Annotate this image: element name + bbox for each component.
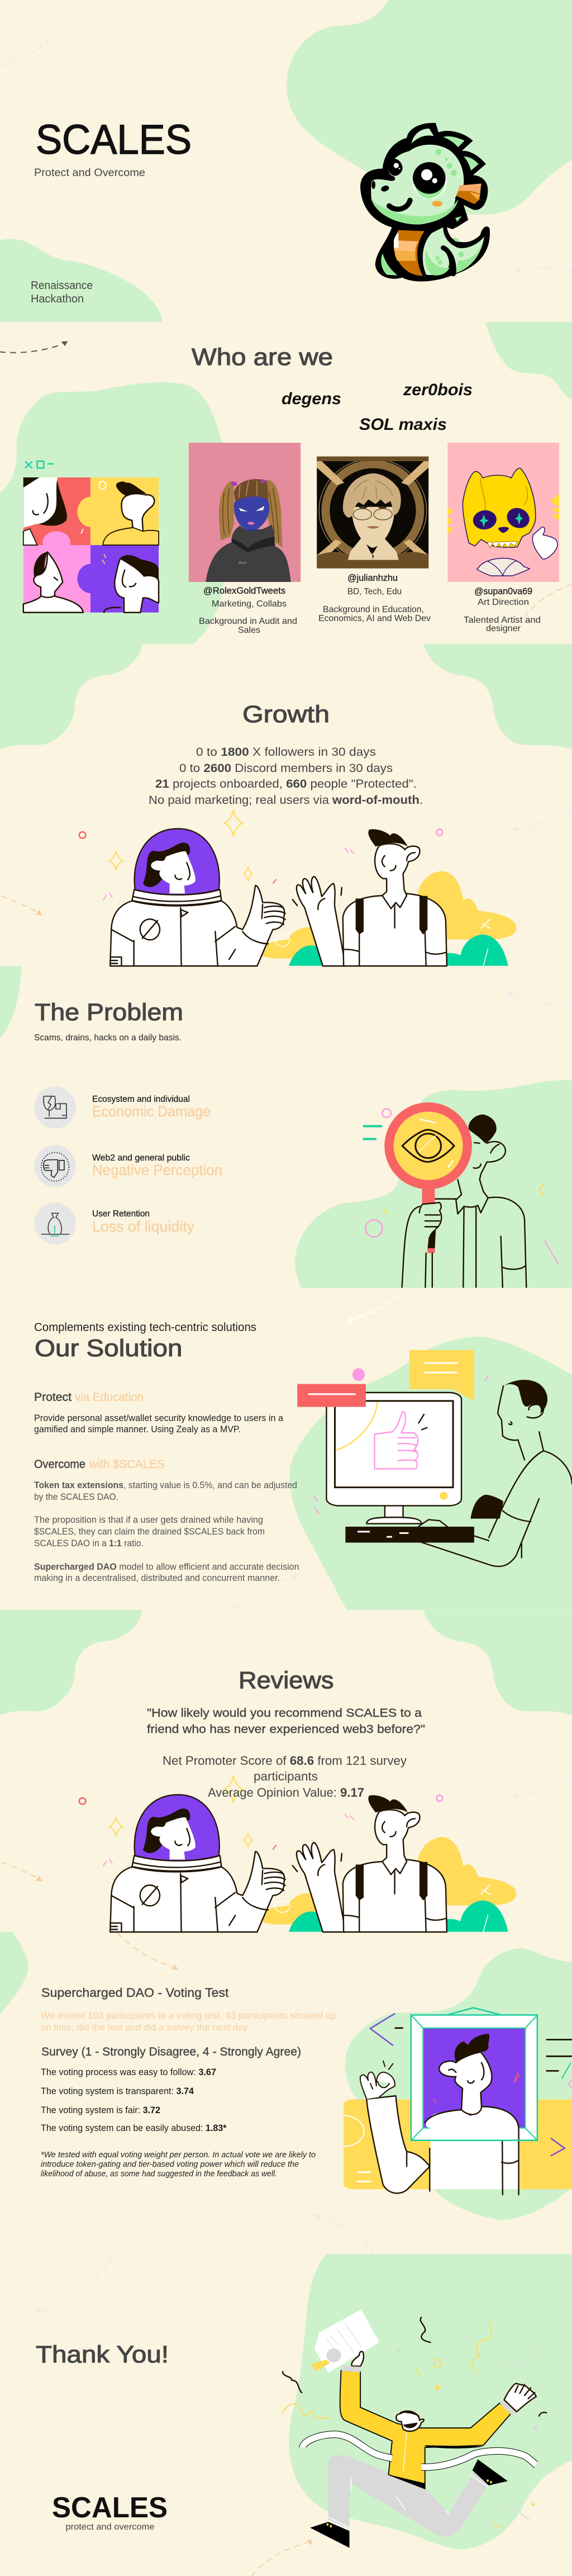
green blob: bottom left	[0, 239, 162, 322]
dashed arrows	[0, 39, 572, 273]
dashed arrow: orange	[522, 585, 572, 621]
survey question: friend who has never experienced web3 before?"	[147, 1723, 425, 1736]
growth stats: No paid marketing; real users via word-of-mouth .	[149, 794, 423, 807]
subheading: protect	[34, 1391, 144, 1404]
captions	[199, 573, 541, 635]
tag: zer0bois: zer0bois	[403, 381, 473, 399]
dashed arrows	[514, 996, 572, 1006]
icon: dragon mascot	[360, 123, 490, 281]
text: participants	[41, 2011, 336, 2033]
illustration: computer user	[297, 1350, 572, 1566]
subheading: overcome: with $SCALES	[89, 1458, 164, 1471]
subheading: protect: Protect	[34, 1391, 72, 1404]
portrait: julianhzhu	[317, 457, 428, 569]
green blobs: top corners	[0, 644, 572, 749]
item: economic damage: Ecosystem and individual	[92, 1095, 190, 1104]
subheading: overcome: Overcome	[34, 1458, 85, 1471]
growth stats: 0 to 2600 Discord members in 30 days	[179, 762, 393, 775]
growth stats	[149, 746, 423, 807]
subheading: overcome	[34, 1458, 164, 1471]
slide: who are we	[0, 322, 572, 644]
footnote: introduce token-gating and tier-based voting power which will reduce the	[41, 2160, 299, 2169]
item: loss of liquidity: User Retention	[92, 1209, 150, 1219]
green blob	[289, 2254, 572, 2549]
heading: Our Solution	[35, 1335, 182, 1362]
caption: supan0va69: designer	[486, 624, 521, 633]
dashed arrows	[117, 1933, 171, 1967]
slide: cover	[0, 0, 572, 322]
dashed arrows	[359, 2236, 374, 2251]
slide: our solution	[34, 1311, 572, 1610]
green blob: right	[295, 1079, 572, 1288]
survey results: The voting system can be easily abused: 1.83*	[41, 2123, 227, 2133]
heading: voting test: Supercharged DAO - Voting Test	[41, 1986, 229, 2000]
tag: degens: degens	[282, 390, 341, 408]
net promoter score: Net Promoter Score of 68.6 from 121 survey	[163, 1754, 407, 1768]
puzzle faces illustration	[23, 477, 159, 613]
heading: Who are we	[192, 344, 333, 371]
icon circle: loss of liquidity	[34, 1202, 76, 1244]
icon: x square dash	[25, 461, 54, 468]
caption: supan0va69: Art Direction	[478, 598, 529, 607]
item: negative perception: Negative Perception	[92, 1162, 222, 1178]
event label	[31, 280, 93, 305]
survey question: "How likely would you recommend SCALES to a	[147, 1707, 422, 1720]
event label: Hackathon	[31, 293, 84, 305]
heading: Thank You!	[36, 2341, 169, 2368]
icon circle: economic damage	[34, 1087, 76, 1129]
item: loss of liquidity: Loss of liquidity	[92, 1218, 194, 1235]
green blob: top right	[287, 0, 572, 215]
icon circle: negative perception	[34, 1145, 76, 1187]
dashed arrow	[0, 345, 60, 353]
item: economic damage	[92, 1095, 211, 1120]
text: overcome description: making in a decentralised, distributed and concurrent manner.	[34, 1573, 280, 1583]
green blobs: top corners	[0, 1610, 572, 1715]
slide: voting test	[0, 1932, 572, 2247]
title: SCALES	[36, 116, 192, 163]
caption: RolexGold	[199, 586, 297, 635]
portrait: supan0va69	[447, 443, 559, 582]
item: loss of liquidity	[92, 1209, 194, 1235]
slide: growth	[0, 644, 572, 966]
eyebrow text: Complements existing tech-centric solutions	[34, 1321, 256, 1334]
portrait: RolexGold: Rich	[239, 561, 247, 565]
net promoter score	[163, 1754, 407, 1800]
tag: SOL maxis: SOL maxis	[359, 415, 447, 434]
slide: the problem	[0, 966, 572, 1319]
slide: reviews	[0, 1610, 572, 1932]
survey results: The voting system is fair: 3.72	[41, 2105, 160, 2115]
green blob: right	[485, 322, 572, 400]
text: overcome description: SCALES DAO in a 1:1 ratio.	[34, 1538, 144, 1549]
caption: supan0va69	[464, 586, 541, 633]
illustration: framed man	[344, 2007, 572, 2195]
heading: Growth	[242, 701, 330, 728]
subtitle: Protect and Overcome	[34, 167, 145, 179]
caption: supan0va69: @supan0va69	[474, 586, 532, 596]
heading: The Problem	[35, 999, 183, 1026]
caption: supan0va69: Talented Artist and	[464, 615, 541, 625]
net promoter score: participants	[254, 1769, 318, 1783]
green blob: left	[0, 1932, 28, 2015]
survey results	[41, 2067, 227, 2133]
caption: RolexGold: Background in Audit and	[199, 617, 297, 626]
subheading: Scams, drains, hacks on a daily basis.	[34, 1033, 182, 1043]
heading: Reviews	[239, 1667, 334, 1694]
text: overcome description: Token tax extensions, starting value is 0.5%, and can be adjusted	[34, 1480, 297, 1490]
survey question	[147, 1707, 425, 1736]
text: participants: on time, did the test and did a survey the next day.	[41, 2023, 250, 2033]
logo: protect and overcome	[66, 2522, 154, 2532]
green blob: left	[0, 382, 223, 644]
text: education description: gamified and simple manner. Using Zealy as a MVP.	[34, 1424, 241, 1434]
net promoter score: Average Opinion Value: 9.17	[208, 1786, 364, 1800]
footnote: *We tested with equal voting weight per person. In actual vote we are likely to	[41, 2151, 316, 2160]
growth stats: 0 to 1800 X followers in 30 days	[196, 746, 376, 759]
event label: Renaissance	[31, 280, 93, 292]
caption: julianhzhu: Background in Education,	[323, 605, 424, 614]
growth stats: 21 projects onboarded, 660 people "Protected".	[155, 778, 417, 790]
portrait: RolexGold	[189, 443, 301, 582]
caption: julianhzhu: BD, Tech, Edu	[347, 587, 402, 596]
illustration: celebrating runner	[282, 2309, 546, 2548]
item: negative perception	[92, 1153, 222, 1178]
item: economic damage: Economic Damage	[92, 1103, 211, 1120]
illustration: astronaut and student	[2, 808, 572, 966]
illustration: magnifier man	[363, 1102, 558, 1287]
heading: survey: Survey (1 - Strongly Disagree, 4 - Strongly Agree)	[41, 2045, 301, 2058]
text: overcome description: Supercharged DAO model to allow efficient and accurate decision	[34, 1562, 299, 1572]
green blob: right	[345, 1948, 572, 2220]
text: overcome description: The proposition is that if a user gets drained while having	[34, 1515, 263, 1525]
caption: RolexGold: @RolexGoldTweets	[203, 586, 285, 596]
caption: RolexGold: Sales	[238, 626, 260, 635]
footnote	[41, 2151, 316, 2179]
caption: RolexGold: Marketing, Collabs	[212, 599, 287, 609]
illustration: astronaut and student	[2, 1774, 572, 1932]
text: overcome description	[34, 1480, 299, 1583]
caption: julianhzhu: Economics, AI and Web Dev	[318, 614, 431, 623]
caption: julianhzhu: @julianhzhu	[347, 573, 398, 583]
text: overcome description: $SCALES, they can claim the drained $SCALES back from	[34, 1527, 265, 1537]
yellow banner	[344, 2100, 572, 2189]
footnote: likelihood of abuse, as some had suggested in the feedback as well.	[41, 2170, 277, 2179]
text: education description	[34, 1413, 284, 1434]
survey results: The voting process was easy to follow: 3.67	[41, 2067, 216, 2077]
text: education description: Provide personal asset/wallet security knowledge to users in a	[34, 1413, 284, 1423]
logo: SCALES	[52, 2492, 168, 2524]
subheading: protect: via Education	[75, 1391, 144, 1404]
text: overcome description: by the SCALES DAO.	[34, 1492, 118, 1502]
caption: julianhzhu	[318, 573, 431, 623]
green blob	[289, 1337, 572, 1610]
slide: thank you	[36, 2236, 572, 2576]
text: participants: We invited 103 participants to a voting test, 43 participants showed up	[41, 2011, 336, 2021]
dashed arrows	[352, 1311, 376, 1320]
survey results: The voting system is transparent: 3.74	[41, 2086, 194, 2096]
green blob: top left	[0, 966, 22, 1039]
item: negative perception: Web2 and general public	[92, 1153, 190, 1163]
